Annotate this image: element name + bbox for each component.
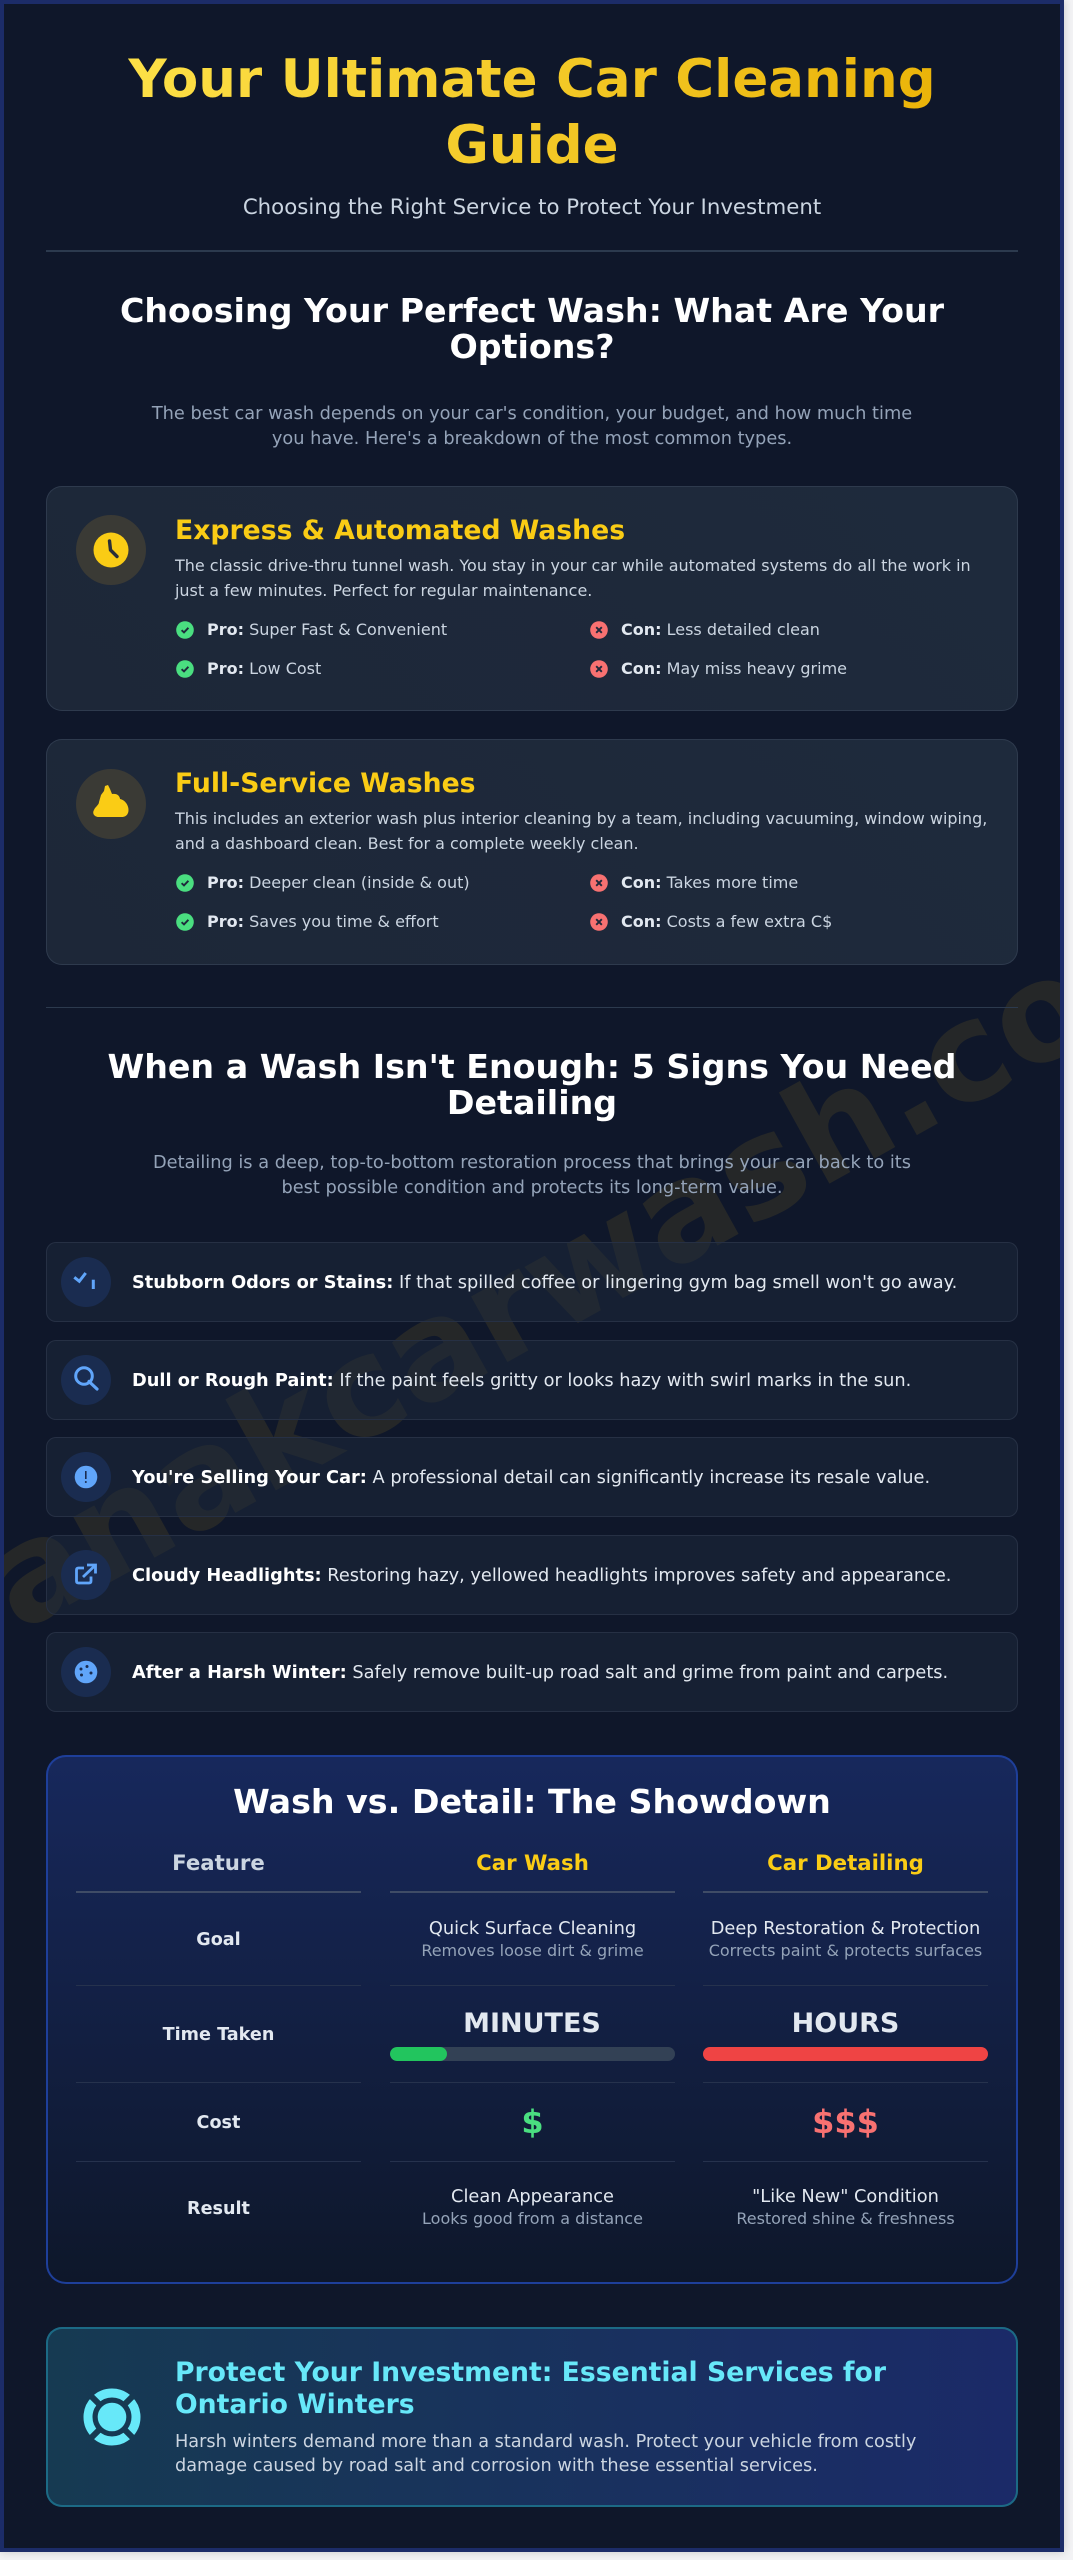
pros and cons [176, 620, 847, 678]
card description: just a few minutes. Perfect for regular maintenance. [175, 581, 592, 600]
icon: magnifier [61, 1355, 111, 1405]
result: car wash [422, 2186, 643, 2228]
cost: car detailing: $$$ [812, 2103, 879, 2141]
card heading: Express & Automated Washes [175, 515, 625, 546]
callout text: Harsh winters demand more than a standard wash. Protect your vehicle from costly [175, 2432, 916, 2452]
sign text: Stubborn Odors or Stains: If that spilled coffee or lingering gym bag smell won't go away. [132, 1273, 957, 1293]
row label: cost: Cost [197, 2113, 240, 2133]
callout heading [175, 2356, 886, 2420]
result: car wash: Looks good from a distance [422, 2209, 643, 2228]
panel: sign 4 [46, 1535, 1018, 1615]
panel: express and automated washes [46, 486, 1018, 711]
result: car wash: Clean Appearance [451, 2186, 614, 2207]
intro text: wash options [152, 404, 912, 449]
con item 1: Con: Takes more time [621, 873, 798, 892]
goal: car detailing: Corrects paint & protects surfaces [709, 1941, 982, 1960]
pro item 1: Pro: Super Fast & Convenient [207, 620, 447, 639]
con item 2: Con: Costs a few extra C$ [621, 912, 832, 931]
row label: goal: Goal [196, 1930, 241, 1950]
card description: This includes an exterior wash plus interior cleaning by a team, including vacuuming, window wiping, [175, 809, 987, 828]
card description [174, 556, 971, 600]
showdown title: Wash vs. Detail: The Showdown [233, 1782, 831, 1821]
subtitle: Choosing the Right Service to Protect Your Investment [243, 195, 821, 220]
panel: sign 3 [46, 1437, 1018, 1517]
callout text: damage caused by road salt and corrosion with these essential services. [175, 2456, 818, 2476]
intro text: detailing [153, 1153, 911, 1198]
title [128, 49, 936, 176]
title: Your Ultimate Car Cleaning [128, 49, 936, 110]
title: Guide [445, 115, 619, 176]
callout heading: Protect Your Investment: Essential Services for [175, 2356, 886, 2388]
sign text: You're Selling Your Car: A professional detail can significantly increase its resale value. [132, 1468, 930, 1488]
heading: signs you need detailing: When a Wash Isn't Enough: 5 Signs You Need [108, 1047, 956, 1086]
panel: protect your investment callout [46, 2327, 1018, 2507]
heading: choosing your perfect wash: Choosing Your Perfect Wash: What Are Your [120, 290, 944, 330]
heading: choosing your perfect wash [120, 290, 944, 366]
result: car detailing: Restored shine & freshness [736, 2209, 955, 2228]
con item 2: Con: May miss heavy grime [621, 659, 847, 678]
icon: palette [61, 1647, 111, 1697]
time: hours with bar: HOURS [792, 2008, 899, 2039]
intro text: wash options: The best car wash depends on your car's condition, your budget, and how much time [152, 404, 912, 424]
sign text: Cloudy Headlights: Restoring hazy, yellowed headlights improves safety and appearance. [132, 1566, 951, 1586]
result: car detailing [736, 2186, 955, 2228]
card description: and a dashboard clean. Best for a complete weekly clean. [175, 834, 639, 853]
result: car detailing: "Like New" Condition [752, 2186, 939, 2207]
icon: external link [61, 1550, 111, 1600]
header: car detailing: Car Detailing [767, 1850, 924, 1876]
cost: car wash: $ [521, 2103, 544, 2141]
card heading: Full-Service Washes [175, 768, 476, 799]
goal: car wash [421, 1918, 644, 1960]
card description: The classic drive-thru tunnel wash. You stay in your car while automated systems do all the work in [175, 556, 971, 575]
intro text: detailing: best possible condition and protects its long-term value. [281, 1178, 783, 1198]
goal: car wash: Quick Surface Cleaning [429, 1918, 636, 1939]
heading: signs you need detailing [108, 1047, 956, 1122]
header: car wash: Car Wash [476, 1850, 589, 1876]
goal: car detailing [709, 1918, 982, 1960]
row label: result: Result [187, 2199, 250, 2219]
icon: life ring [84, 2388, 140, 2446]
intro text: detailing: Detailing is a deep, top-to-bottom restoration process that brings your car back to its [153, 1153, 911, 1173]
con item 1: Con: Less detailed clean [621, 620, 820, 639]
icon: clock [76, 515, 146, 585]
pro item 2: Pro: Saves you time & effort [207, 912, 439, 931]
callout heading: Ontario Winters [175, 2388, 415, 2420]
pro item 1: Pro: Deeper clean (inside & out) [207, 873, 470, 892]
header: feature: Feature [172, 1850, 265, 1876]
heading: choosing your perfect wash: Options? [449, 326, 615, 366]
icon: soap foam [76, 769, 146, 839]
goal: car detailing: Deep Restoration & Protection [711, 1918, 980, 1939]
pro item 2: Pro: Low Cost [207, 659, 321, 678]
row label: time taken: Time Taken [163, 2025, 274, 2045]
panel: full-service washes [46, 739, 1018, 965]
goal: car wash: Removes loose dirt & grime [421, 1941, 644, 1960]
time: minutes with bar [390, 2008, 675, 2061]
intro text: wash options: you have. Here's a breakdown of the most common types. [272, 429, 792, 449]
panel: wash vs detail showdown [46, 1755, 1018, 2284]
time: minutes with bar: MINUTES [463, 2008, 601, 2039]
sign text: After a Harsh Winter: Safely remove built-up road salt and grime from paint and carpets. [132, 1663, 948, 1683]
sign text: Dull or Rough Paint: If the paint feels gritty or looks hazy with swirl marks in the sun. [132, 1371, 911, 1391]
callout text [175, 2432, 916, 2476]
icon: info [61, 1452, 111, 1502]
icon: check and bar [61, 1257, 111, 1307]
time: hours with bar [703, 2008, 988, 2061]
heading: signs you need detailing: Detailing [447, 1083, 617, 1122]
card description [174, 809, 987, 853]
panel: sign 2 [46, 1340, 1018, 1420]
pros and cons [176, 873, 832, 931]
panel: sign 1 [46, 1242, 1018, 1322]
panel: sign 5 [46, 1632, 1018, 1712]
